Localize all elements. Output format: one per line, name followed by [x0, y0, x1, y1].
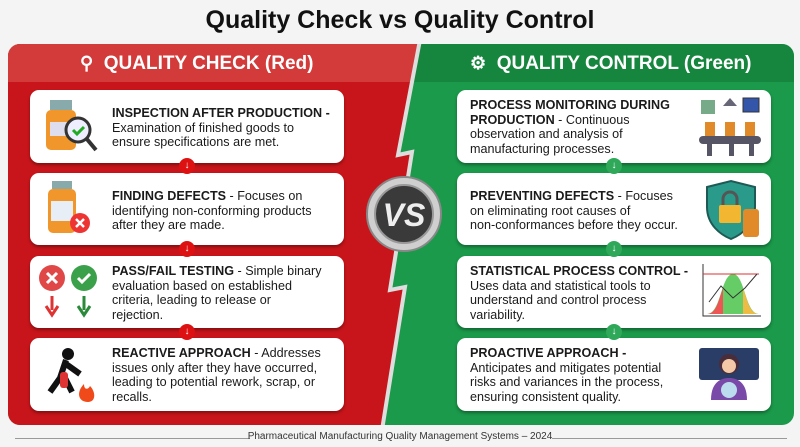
card: reactive: issues only after they have occurred,: [112, 361, 317, 375]
icon: bell curve chart: [702, 264, 761, 316]
icon: shield lock: [706, 180, 759, 240]
card: spc: [457, 256, 771, 328]
icon: cracked bottle: [48, 181, 90, 233]
vs badge: VS: [383, 197, 426, 233]
card: preventing defects: on eliminating root causes of: [470, 204, 630, 218]
card: finding defects: FINDING DEFECTS - Focuses on: [112, 189, 302, 203]
icon: analyst with crystal ball: [699, 348, 759, 400]
card: process monitoring: [457, 90, 771, 163]
vs badge: [366, 176, 442, 252]
arrows: ↓: [612, 160, 616, 171]
card: reactive: [30, 338, 344, 411]
arrows: [606, 158, 622, 174]
card: spc: variability.: [470, 308, 525, 322]
card: proactive: risks and variances in the process,: [470, 375, 663, 389]
panel: quality control cards: ↓: [612, 326, 616, 337]
card: proactive: [457, 338, 771, 411]
panel: quality check cards: ↓: [184, 326, 190, 337]
card: finding defects: [30, 173, 344, 245]
card: preventing defects: PREVENTING DEFECTS - Focuses: [470, 189, 673, 203]
card: reactive: REACTIVE APPROACH - Addresses: [112, 346, 321, 360]
card: finding defects: identifying non-conforming products: [112, 204, 312, 218]
icon: fire extinguisher: [48, 348, 94, 402]
card: spc: STATISTICAL PROCESS CONTROL -: [470, 264, 688, 278]
panel: quality control cards: [456, 90, 772, 414]
card: process monitoring: PROCESS MONITORING DURING: [470, 98, 670, 112]
icon: bottle with magnifier: [46, 100, 98, 152]
card: reactive: leading to potential rework, scrap, or: [112, 375, 315, 389]
card: inspection: [30, 90, 344, 163]
card: process monitoring: PRODUCTION - Continuous: [470, 113, 630, 127]
arrows: [179, 158, 195, 174]
card: preventing defects: [457, 173, 771, 245]
card: spc: understand and control process: [470, 293, 646, 307]
card: pass/fail: PASS/FAIL TESTING - Simple binary: [112, 264, 322, 278]
heading: quality check: ⚲ QUALITY CHECK (Red): [80, 53, 313, 74]
card: pass/fail: evaluation based on established: [112, 279, 292, 293]
card: proactive: Anticipates and mitigates potential: [470, 361, 661, 375]
card: pass/fail: [30, 256, 344, 328]
card: process monitoring: observation and analysis of: [470, 127, 623, 141]
icon: conveyor: [699, 98, 761, 156]
heading: quality control: ⚙ QUALITY CONTROL (Green): [470, 53, 751, 74]
card: process monitoring: manufacturing processes.: [470, 142, 614, 156]
card: inspection: Examination of finished goods to: [112, 121, 294, 135]
panel: quality check cards: ↓: [184, 243, 190, 254]
footer: Pharmaceutical Manufacturing Quality Management Systems – 2024: [248, 431, 552, 442]
card: preventing defects: non-conformances before they occur.: [470, 218, 678, 232]
icon: pass fail: [39, 265, 97, 318]
card: spc: Uses data and statistical tools to: [470, 279, 651, 293]
card: pass/fail: criteria, leading to release or: [112, 293, 271, 307]
arrows: ↓: [184, 160, 190, 171]
card: finding defects: after they are made.: [112, 218, 225, 232]
title: Quality Check vs Quality Control: [206, 6, 594, 34]
card: proactive: ensuring consistent quality.: [470, 390, 621, 404]
card: pass/fail: rejection.: [112, 308, 163, 322]
panel: quality control cards: ↓: [612, 243, 616, 254]
card: inspection: INSPECTION AFTER PRODUCTION -: [112, 106, 330, 120]
card: reactive: recalls.: [112, 390, 152, 404]
card: inspection: ensure specifications are met.: [112, 135, 279, 149]
panel: quality check cards: [28, 90, 346, 415]
card: proactive: PROACTIVE APPROACH -: [470, 346, 626, 360]
